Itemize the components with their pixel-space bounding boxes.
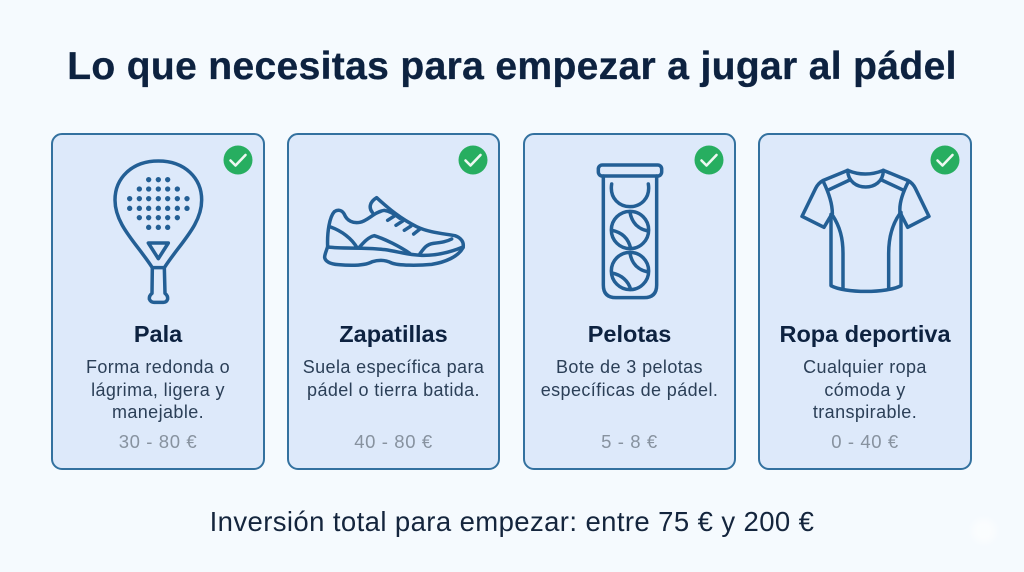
price: ropa deportiva: 0 - 40 €	[831, 431, 899, 452]
text: pala description: lágrima, ligera y	[91, 380, 225, 400]
price: pala: 30 - 80 €	[119, 431, 197, 452]
icon: padel racket	[115, 161, 202, 302]
price: pelotas: 5 - 8 €	[601, 431, 658, 452]
text: ropa deportiva description: Cualquier ropa	[803, 357, 927, 377]
text: ropa deportiva description	[803, 357, 927, 422]
text: pala description: manejable.	[112, 402, 204, 422]
text: zapatillas description: pádel o tierra batida.	[307, 380, 480, 400]
text: pala description: Forma redonda o	[86, 357, 230, 377]
text: zapatillas description	[303, 357, 484, 400]
text: pelotas description	[541, 357, 718, 400]
panel: ropa deportiva	[758, 133, 972, 470]
panel: pala	[51, 133, 265, 470]
panel: pelotas	[523, 133, 736, 470]
icon: ball tube	[598, 165, 662, 298]
text: ropa deportiva description: cómoda y	[824, 380, 906, 400]
text: ropa deportiva description: transpirable.	[813, 402, 917, 422]
icon: green check, pala	[224, 146, 252, 174]
text: pelotas description: específicas de pádel.	[541, 380, 718, 400]
heading: pelotas: Pelotas	[588, 321, 671, 347]
icon: padel shoe	[325, 198, 463, 265]
panel: zapatillas	[287, 133, 500, 470]
heading: zapatillas: Zapatillas	[339, 321, 448, 347]
text: pala description	[86, 357, 230, 422]
icon: t-shirt	[802, 170, 929, 291]
total investment text: Inversión total para empezar: entre 75 € y 200 €	[210, 506, 814, 537]
price: zapatillas: 40 - 80 €	[354, 431, 433, 452]
icon: green check, ropa deportiva	[930, 146, 960, 174]
icon: green check, pelotas	[694, 146, 724, 174]
title: Lo que necesitas para empezar a jugar al pádel	[67, 45, 957, 88]
text: zapatillas description: Suela específica para	[303, 357, 484, 377]
heading: pala: Pala	[134, 321, 182, 347]
icon: green check, zapatillas	[458, 146, 488, 174]
text: pelotas description: Bote de 3 pelotas	[556, 357, 703, 377]
faint sparkle mark	[968, 515, 1000, 547]
heading: ropa deportiva: Ropa deportiva	[779, 321, 951, 347]
